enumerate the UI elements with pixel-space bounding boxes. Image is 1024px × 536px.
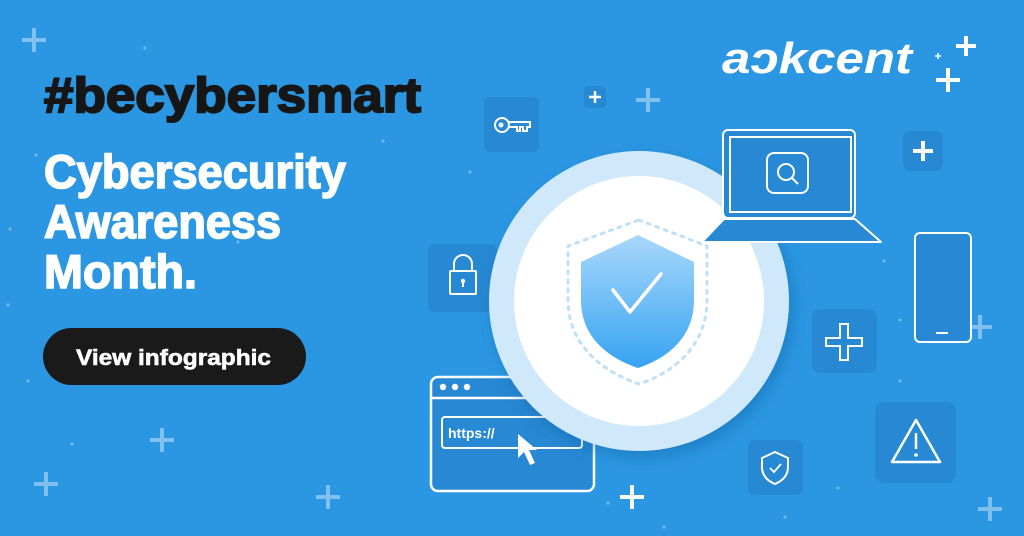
browser window: https:// (448, 425, 495, 441)
icon: plus outline tile (812, 309, 877, 373)
icon: plus tile top right (903, 131, 943, 171)
title (44, 145, 346, 298)
icon: shield (581, 235, 694, 368)
icon: search (767, 153, 808, 193)
browser window (431, 377, 594, 491)
icon: key tile (484, 97, 539, 152)
laptop (702, 130, 881, 242)
button: view infographic (43, 328, 306, 385)
icon: lock tile (428, 244, 497, 312)
title: Month. (44, 245, 197, 298)
icon: small plus tile (584, 86, 606, 108)
title: Awareness (44, 195, 281, 248)
heading: hashtag: #becybersmart (44, 69, 421, 123)
title: Cybersecurity (44, 145, 346, 198)
icon: small shield tile (748, 440, 803, 495)
white plus bottom (620, 485, 644, 509)
button: view infographic: View infographic (76, 345, 271, 370)
icon: warning tile (875, 402, 956, 483)
icon: phone (915, 233, 971, 342)
central circle with shield (489, 151, 789, 451)
logo: aɔkcent (722, 34, 915, 83)
cursor (518, 434, 537, 465)
logo (722, 34, 976, 92)
